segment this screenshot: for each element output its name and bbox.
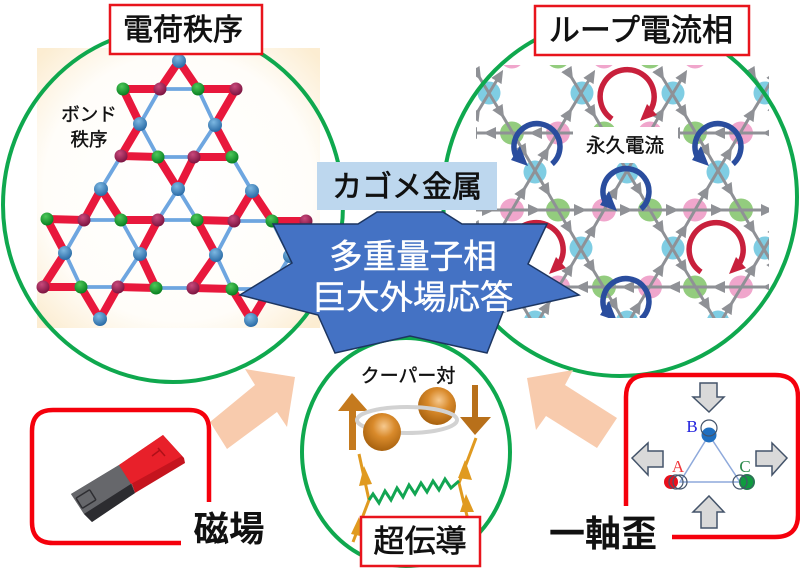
electron front bbox=[363, 413, 401, 451]
phonon zigzag bbox=[369, 479, 459, 503]
circle: charge order outline bbox=[3, 28, 343, 382]
label: magnetic field: 磁場 bbox=[193, 509, 265, 549]
panel: uniaxial strain frame bbox=[626, 375, 798, 537]
panel: bond order lattice bbox=[36, 48, 320, 328]
heading: superconductivity bbox=[361, 517, 480, 566]
callout: multiple quantum phases star bbox=[240, 212, 579, 353]
lattice blue nodes bbox=[58, 54, 297, 327]
label: uniaxial strain: 一軸歪 bbox=[549, 513, 657, 554]
blue current arrow left bbox=[511, 124, 560, 166]
cyan sites bbox=[478, 82, 776, 334]
callout: multiple quantum phases star: 巨大外場応答 bbox=[312, 280, 514, 317]
arrow: spin up bbox=[338, 393, 368, 450]
lattice blue bonds bbox=[65, 89, 290, 289]
pink sites bbox=[500, 46, 753, 298]
green sites bbox=[500, 46, 753, 298]
ring bbox=[357, 407, 457, 433]
atom C bbox=[733, 457, 755, 490]
red current arrow left bbox=[522, 220, 566, 274]
red current arrow top bbox=[600, 70, 657, 121]
text: cooper pair: クーパー対 bbox=[361, 365, 455, 387]
blue current arrow center bbox=[600, 169, 649, 211]
diagram: triangle under strain bbox=[632, 383, 787, 528]
arrow: spin down bbox=[460, 385, 491, 435]
red current arrow right bbox=[689, 223, 746, 274]
electron back bbox=[418, 387, 456, 425]
text: bond order: ボンド bbox=[61, 104, 117, 125]
lattice red bonds bbox=[43, 61, 306, 320]
atom A: A bbox=[672, 457, 685, 476]
text: permanent current: 永久電流 bbox=[586, 135, 664, 157]
circle: superconductivity outline bbox=[302, 338, 510, 566]
heading: superconductivity: 超伝導 bbox=[374, 524, 466, 559]
text: bond order: 秩序 bbox=[70, 129, 108, 150]
arrow: uniaxial strain input bbox=[527, 370, 617, 448]
blue current arrow bottom bbox=[600, 279, 649, 321]
heading: charge order: 電荷秩序 bbox=[123, 14, 243, 47]
permanent current label background bbox=[573, 127, 678, 163]
panel: magnetic field frame bbox=[32, 410, 209, 543]
icon: bar magnet bbox=[71, 435, 185, 522]
diagram: cooper pair bbox=[338, 365, 491, 542]
label: kagome metal: カゴメ金属 bbox=[332, 171, 482, 204]
label: kagome metal bbox=[317, 162, 497, 210]
arrow: magnetic field input bbox=[210, 369, 295, 449]
atom A bbox=[664, 457, 687, 489]
heading: charge order bbox=[110, 5, 262, 54]
fermion arrowheads bbox=[351, 460, 474, 537]
fermion lines bbox=[353, 438, 476, 542]
heading: loop current phase bbox=[535, 6, 749, 55]
gray current lines with arrowheads bbox=[476, 66, 769, 318]
blue current arrow right bbox=[692, 124, 741, 166]
lattice maroon nodes bbox=[36, 82, 312, 294]
circle: loop current outline bbox=[443, 18, 797, 376]
callout: multiple quantum phases star: 多重量子相 bbox=[329, 239, 497, 276]
atom C: C bbox=[739, 457, 751, 476]
strain arrows bbox=[632, 383, 787, 528]
atom B bbox=[686, 417, 717, 442]
lattice green nodes bbox=[40, 82, 278, 296]
panel: loop current lattice bbox=[476, 65, 769, 318]
atom B: B bbox=[686, 417, 698, 436]
heading: loop current phase: ループ電流相 bbox=[549, 13, 733, 48]
